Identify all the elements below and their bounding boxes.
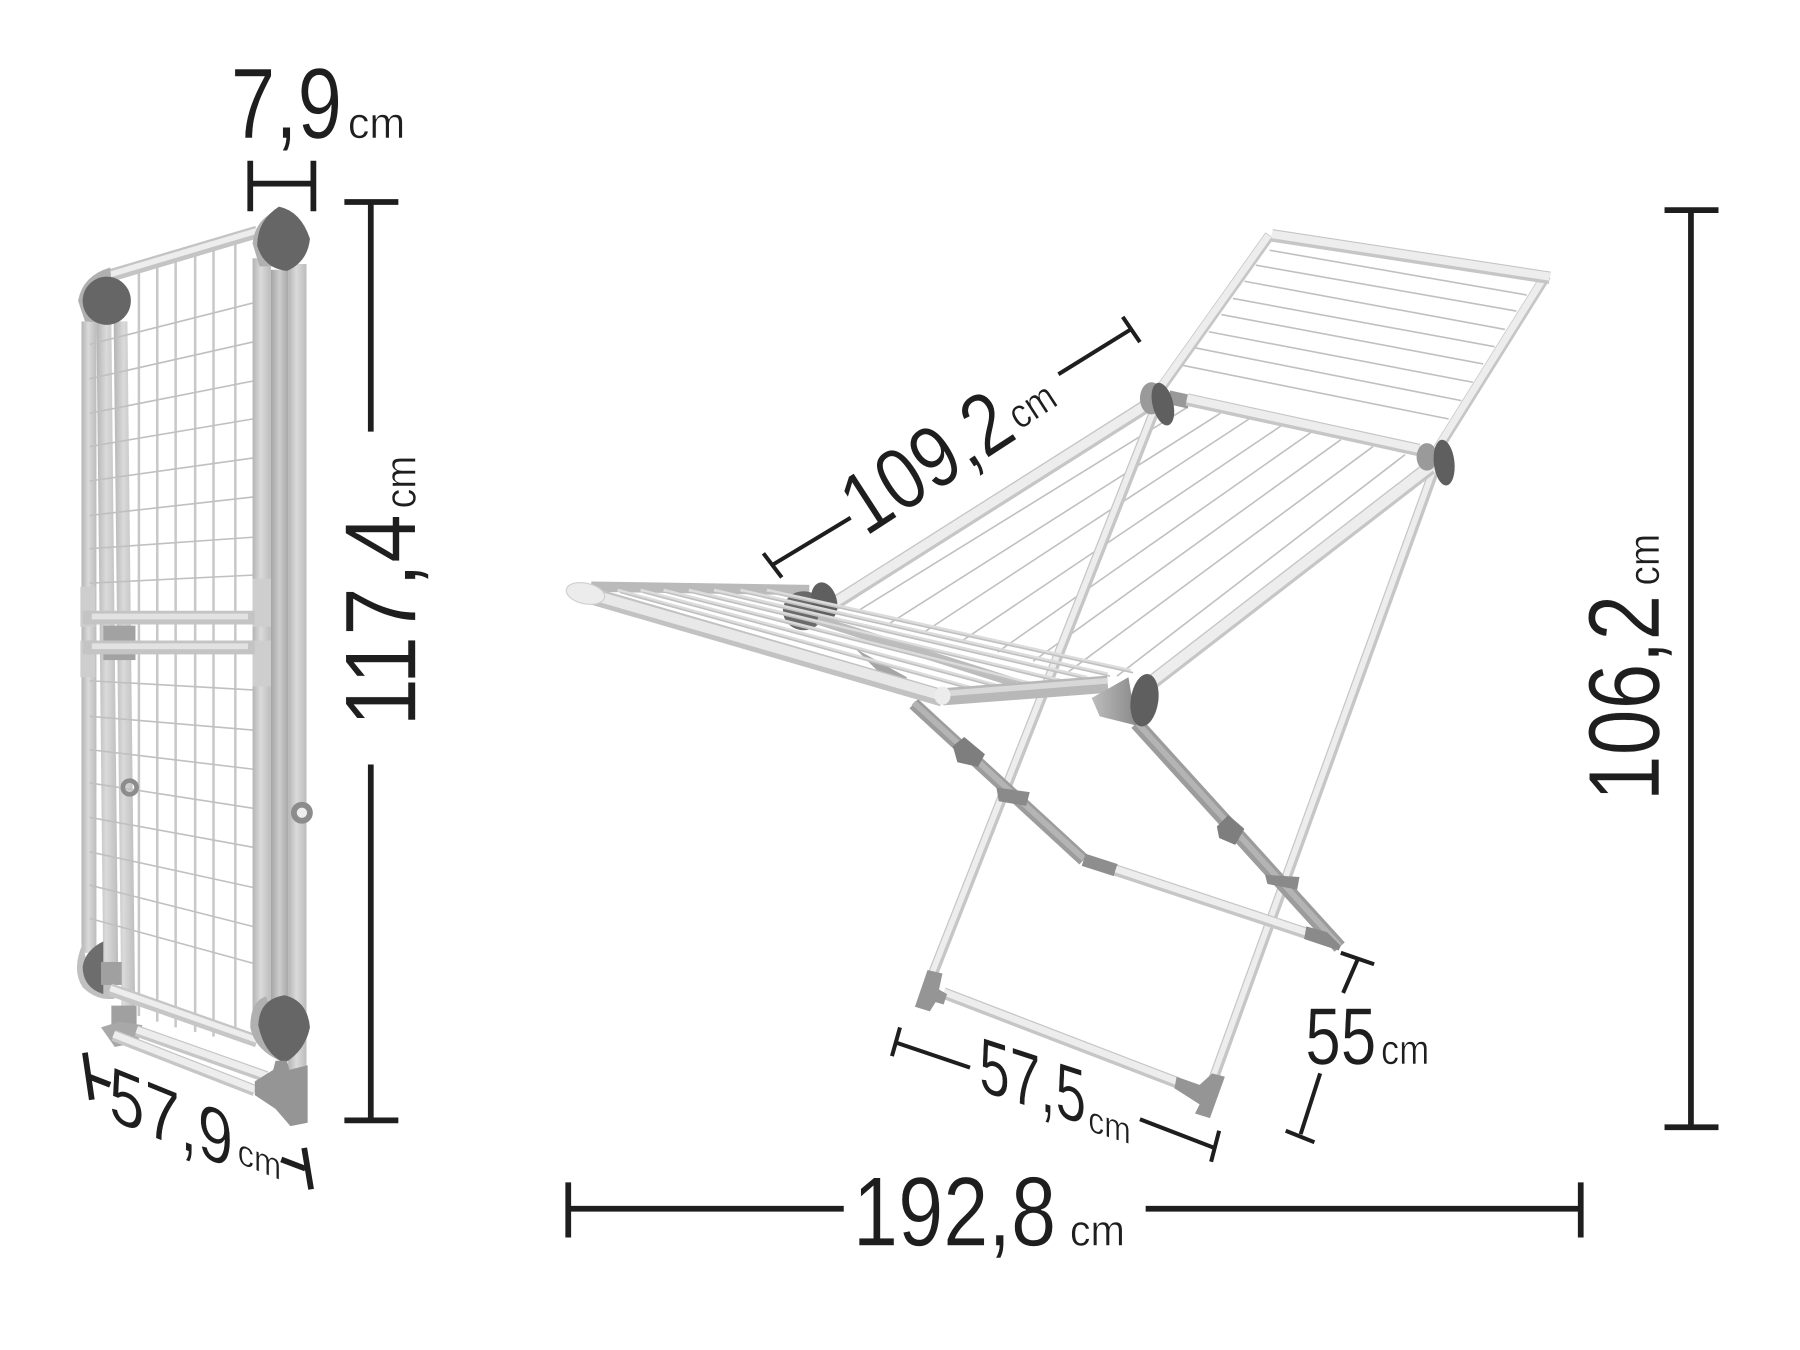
near wing back rail xyxy=(591,587,809,590)
dimension: length 109,2 cm: 109,2 xyxy=(823,372,1030,553)
near wing wires xyxy=(618,590,1133,691)
legs xyxy=(929,413,1435,1079)
dimension: open height 106,2 cm xyxy=(1569,210,1718,1127)
near wing end bar xyxy=(934,681,1108,705)
dimension: length 109,2 cm: cm xyxy=(999,373,1065,438)
dimension: depth 7,9 cm xyxy=(231,49,405,211)
dimension: inner width 57,5 cm: 57,5 xyxy=(979,1019,1086,1142)
dimension: foot depth 55 cm: 55 xyxy=(1305,992,1376,1082)
near hub C xyxy=(783,580,841,630)
dimension: inner width 57,5 cm xyxy=(892,1019,1219,1162)
middle crossbars and sleeves xyxy=(80,579,271,686)
top bar xyxy=(110,231,257,276)
hub B xyxy=(1417,439,1457,487)
dimension: open length 192,8 cm: cm xyxy=(1070,1208,1125,1256)
dimension: height 117,4 cm: cm xyxy=(378,456,426,509)
dimension: open length 192,8 cm xyxy=(568,1157,1581,1267)
scissor arm right xyxy=(1136,722,1340,947)
dimension: depth 7,9 cm: 7,9 xyxy=(231,49,342,160)
grid of wires xyxy=(90,241,253,1040)
open rack illustration xyxy=(564,234,1550,1118)
dimension: width 57,9 cm: 57,9 xyxy=(109,1050,233,1187)
rear base rail xyxy=(1116,869,1341,951)
dimension: height 117,4 cm: 117,4 xyxy=(326,514,438,727)
far wing frame xyxy=(1158,234,1550,450)
dimension: inner width 57,5 cm: cm xyxy=(1088,1098,1131,1152)
near wing xyxy=(564,579,1162,728)
base foot xyxy=(255,1061,308,1126)
dimension: foot depth 55 cm xyxy=(1286,953,1429,1142)
dimension: width 57,9 cm xyxy=(85,1050,311,1189)
near wing shadow and inner tube xyxy=(817,620,1016,689)
dimension: open length 192,8 cm: 192,8 xyxy=(853,1157,1056,1267)
hub D xyxy=(1092,672,1162,728)
dimension: open height 106,2 cm: cm xyxy=(1621,534,1669,585)
top left hub xyxy=(78,267,131,325)
top right hub xyxy=(253,207,310,271)
dimension: width 57,9 cm: cm xyxy=(238,1130,281,1189)
dimension: length 109,2 cm xyxy=(763,317,1140,577)
near wing front rail xyxy=(564,579,942,698)
hub A xyxy=(1140,380,1178,428)
folded rack illustration xyxy=(77,207,310,1126)
bottom bar xyxy=(110,988,257,1041)
front base rail xyxy=(944,992,1177,1083)
long rails xyxy=(832,405,1430,682)
dimension: depth 7,9 cm: cm xyxy=(348,100,405,148)
dimension: foot depth 55 cm: cm xyxy=(1381,1027,1429,1073)
small hook xyxy=(123,781,137,794)
dimension: height 117,4 cm xyxy=(326,202,438,1120)
centre cross bar xyxy=(1169,397,1419,450)
side knob xyxy=(294,805,310,821)
folded base rods xyxy=(101,1006,266,1091)
far wing wires xyxy=(1181,250,1527,419)
bottom right hub xyxy=(250,995,310,1063)
bottom left hub xyxy=(77,941,122,999)
scissor arm left xyxy=(914,703,1116,870)
left tubes xyxy=(82,321,135,1039)
foot left xyxy=(915,970,947,1011)
foot right xyxy=(1174,1073,1225,1118)
dimension: open height 106,2 cm: 106,2 xyxy=(1569,595,1681,801)
centre wires xyxy=(856,408,1405,676)
right tubes xyxy=(253,258,307,1091)
